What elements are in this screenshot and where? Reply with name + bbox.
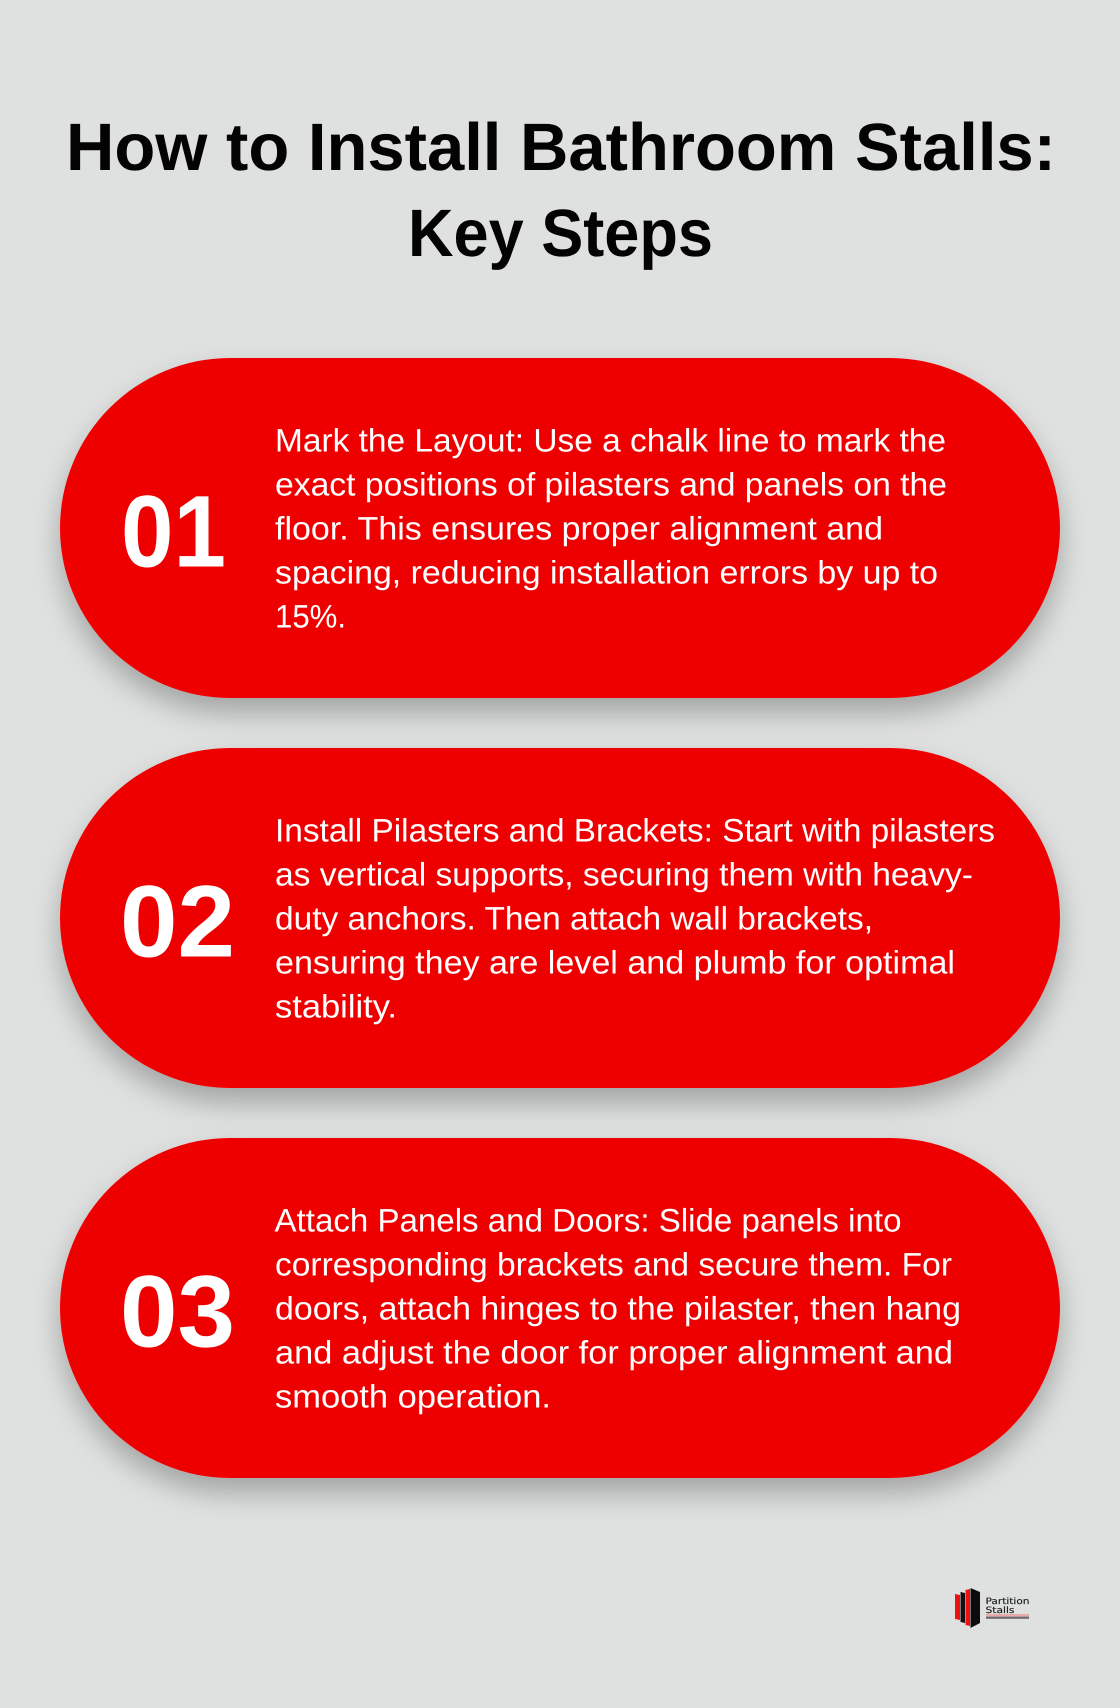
step 03 description: doors, attach hinges to the pilaster, then hang xyxy=(275,1291,961,1327)
icon: stall panels xyxy=(955,1588,980,1628)
panel: step 02 xyxy=(60,748,1060,1088)
step 01 description: spacing, reducing installation errors by up to xyxy=(275,554,938,590)
logo wordmark: Stalls xyxy=(986,1606,1015,1616)
step 03 description: corresponding brackets and secure them. For xyxy=(275,1247,952,1283)
panel: step 01 xyxy=(60,358,1060,698)
step 02 description: stability. xyxy=(275,988,397,1024)
step 01 description: 15%. xyxy=(275,598,346,634)
step 03 description: smooth operation. xyxy=(275,1378,551,1414)
logo wordmark: Partition xyxy=(986,1597,1030,1607)
step 03 description: Attach Panels and Doors: Slide panels into xyxy=(274,1203,902,1239)
step 02 description: duty anchors. Then attach wall brackets, xyxy=(275,901,873,937)
logo: Partition Stalls xyxy=(955,1588,1030,1628)
title: How to Install Bathroom Stalls: xyxy=(66,110,1056,185)
logo wordmark xyxy=(986,1597,1030,1619)
step number 01: 01 xyxy=(121,474,226,588)
title: Key Steps xyxy=(408,196,713,271)
step 03 description: and adjust the door for proper alignment and xyxy=(275,1334,953,1370)
step 01 description: Mark the Layout: Use a chalk line to mark the xyxy=(275,423,946,459)
step 02 description: ensuring they are level and plumb for optimal xyxy=(275,944,955,980)
step 02 description xyxy=(275,813,995,1024)
step number 03: 03 xyxy=(120,1254,235,1368)
step 02 description: Install Pilasters and Brackets: Start with pilasters xyxy=(275,813,995,849)
step 01 description: floor. This ensures proper alignment and xyxy=(275,511,883,547)
panel: step 03 xyxy=(60,1138,1060,1478)
step number 02: 02 xyxy=(120,864,235,978)
step 01 description xyxy=(275,423,947,634)
title xyxy=(66,110,1056,271)
step 03 description xyxy=(274,1203,961,1414)
step 01 description: exact positions of pilasters and panels on the xyxy=(275,467,947,503)
step 02 description: as vertical supports, securing them with heavy- xyxy=(275,857,973,893)
